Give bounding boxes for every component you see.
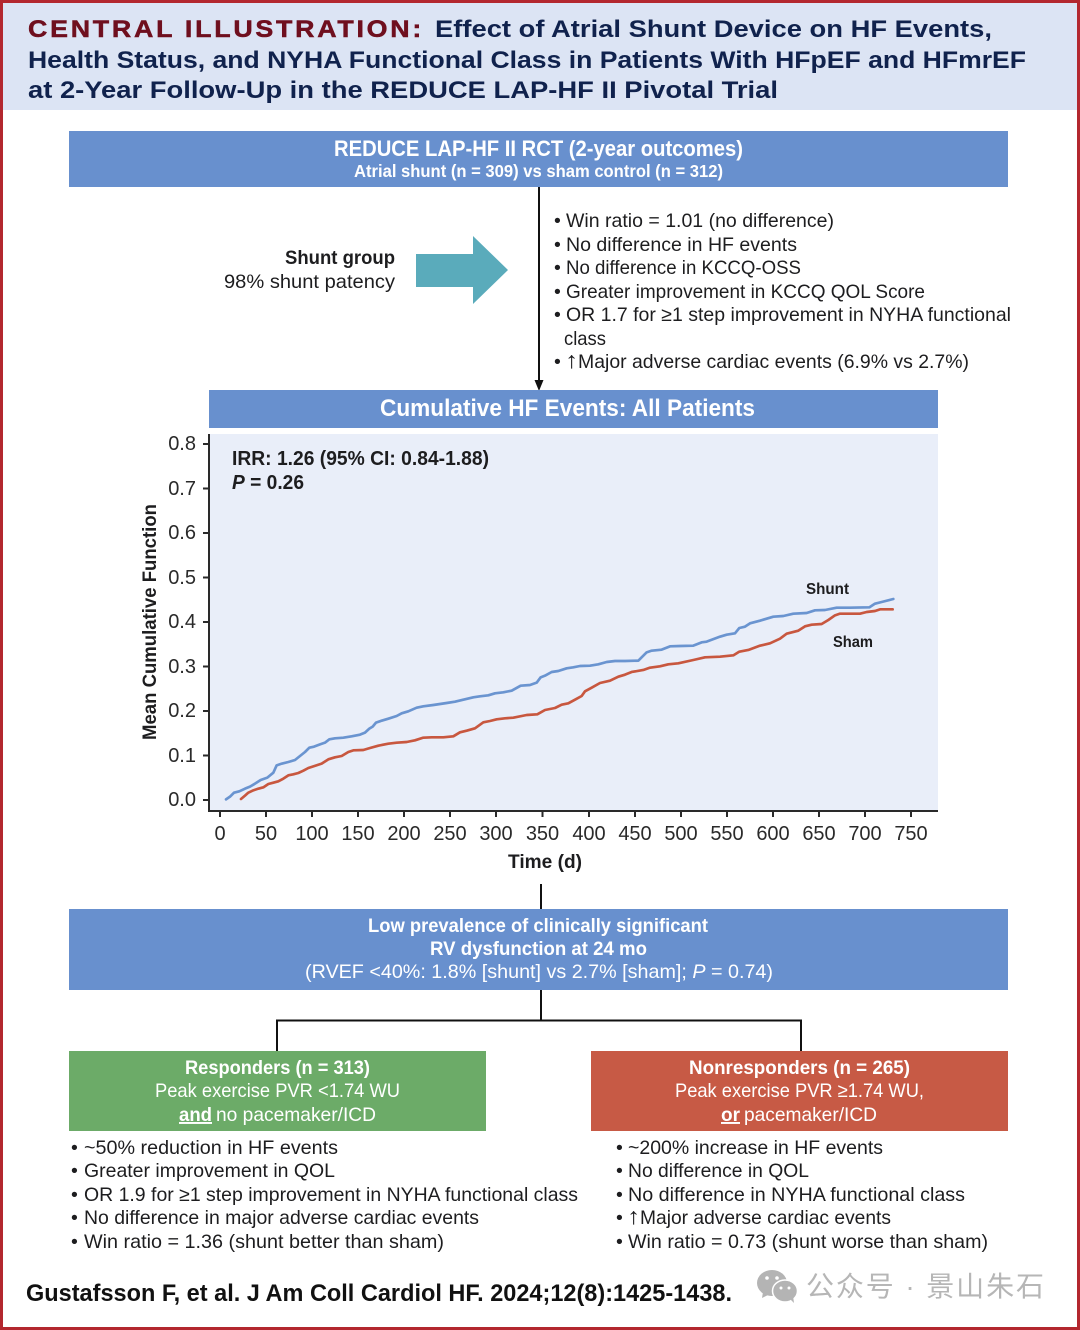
list: overall outcomes: Greater improvement in KCCQ QOL Score — [566, 281, 925, 303]
list: nonresponder outcomes: • — [616, 1184, 623, 1206]
panel: nonresponders: Nonresponders (n = 265) — [689, 1057, 910, 1079]
list: overall outcomes: • — [554, 281, 561, 303]
panel: nonresponders — [591, 1051, 1008, 1131]
arrow: trial to cumulative events — [534, 187, 544, 391]
label: shunt: Shunt — [806, 581, 850, 598]
citation: Gustafsson F, et al. J Am Coll Cardiol HF. 2024;12(8):1425-1438. — [26, 1280, 732, 1307]
line: shunt curve — [226, 599, 893, 799]
line: sham curve — [241, 609, 893, 799]
list: responder outcomes: Win ratio = 1.36 (shunt better than sham) — [84, 1231, 444, 1253]
list: responder outcomes — [71, 1137, 578, 1253]
title banner — [2, 2, 1078, 110]
y-axis tick labels: 0.5 — [168, 567, 196, 589]
list: nonresponder outcomes: • — [616, 1160, 623, 1182]
panel: responders: and — [179, 1104, 212, 1126]
panel: nonresponders: or — [721, 1104, 740, 1126]
y-axis tick labels: 0.1 — [168, 745, 196, 767]
panel: RV dysfunction: Low prevalence of clinically significant — [368, 915, 708, 937]
icon: teal arrow — [416, 236, 508, 304]
list: responder outcomes: Greater improvement in QOL — [84, 1160, 335, 1182]
list: overall outcomes: Win ratio = 1.01 (no difference) — [566, 210, 834, 232]
y-axis tick labels: 0.7 — [168, 478, 196, 500]
list: nonresponder outcomes: ~200% increase in HF events — [628, 1137, 883, 1159]
list: nonresponder outcomes: • — [616, 1137, 623, 1159]
list: nonresponder outcomes: No difference in QOL — [628, 1160, 809, 1182]
y-axis tick labels: 0.4 — [168, 611, 196, 633]
x-axis tick labels: 150 — [341, 823, 375, 845]
y-axis tick labels: 0.8 — [168, 433, 196, 455]
heading: cumulative HF events — [209, 390, 938, 428]
panel: responders: no pacemaker/ICD — [216, 1104, 376, 1126]
list: responder outcomes: • — [71, 1160, 78, 1182]
panel: responders — [69, 1051, 486, 1131]
watermark — [757, 1270, 1044, 1303]
panel: nonresponders: pacemaker/ICD — [744, 1104, 877, 1126]
x-axis tick labels: 600 — [756, 823, 790, 845]
label: sham: Sham — [833, 634, 873, 651]
x-axis tick labels: 50 — [255, 823, 277, 845]
y-axis tick labels: 0.2 — [168, 700, 196, 722]
text: shunt group patency: Shunt group — [285, 247, 395, 269]
list: responder outcomes: • — [71, 1184, 78, 1206]
list: overall outcomes: class — [564, 328, 606, 350]
list: overall outcomes: • — [554, 304, 561, 326]
panel: responders: Peak exercise PVR <1.74 WU — [155, 1080, 400, 1102]
x-axis tick labels: 450 — [618, 823, 652, 845]
x-axis tick labels: 200 — [387, 823, 421, 845]
x-axis tick labels: 750 — [894, 823, 928, 845]
list: nonresponder outcomes: • — [616, 1231, 623, 1253]
panel: trial header: Atrial shunt (n = 309) vs sham control (n = 312) — [354, 161, 723, 181]
panel: responders: Responders (n = 313) — [185, 1057, 370, 1079]
panel: RV dysfunction — [69, 909, 1008, 990]
x-axis tick labels: 0 — [214, 823, 226, 845]
x-axis tick labels — [214, 823, 928, 845]
x-axis tick labels: 250 — [433, 823, 467, 845]
y-axis tick labels — [168, 433, 196, 811]
title banner: Health Status, and NYHA Functional Class in Patients With HFpEF and HFmrEF — [28, 47, 1026, 74]
panel: nonresponders: Peak exercise PVR ≥1.74 WU, — [675, 1080, 924, 1102]
list: overall outcomes: No difference in KCCQ-OSS — [566, 257, 801, 279]
panel: trial header: REDUCE LAP-HF II RCT (2-year outcomes) — [334, 136, 743, 161]
list: overall outcomes: ↑ — [565, 347, 578, 373]
title banner: CENTRAL ILLUSTRATION: — [28, 16, 424, 43]
list: nonresponder outcomes — [616, 1137, 988, 1253]
text: shunt group patency — [224, 247, 395, 293]
x-axis tick labels: 400 — [572, 823, 606, 845]
x-axis tick labels: 550 — [710, 823, 744, 845]
y-axis tick labels: 0.6 — [168, 522, 196, 544]
list: overall outcomes: No difference in HF events — [566, 234, 797, 256]
x-axis tick labels: 500 — [664, 823, 698, 845]
list: overall outcomes: • — [554, 234, 561, 256]
panel: trial header — [69, 131, 1008, 187]
panel: RV dysfunction: (RVEF <40%: 1.8% [shunt] vs 2.7% [sham]; P = 0.74) — [305, 961, 773, 983]
list: nonresponder outcomes: ↑ — [627, 1203, 640, 1229]
list: overall outcomes: • — [554, 351, 561, 373]
y-axis title: Mean Cumulative Function — [140, 504, 161, 740]
connector: split to subgroups — [277, 990, 801, 1051]
list: responder outcomes: ~50% reduction in HF events — [84, 1137, 338, 1159]
list: overall outcomes — [554, 210, 1011, 373]
list: nonresponder outcomes: Major adverse cardiac events — [640, 1207, 891, 1229]
y-axis tick labels: 0.3 — [168, 656, 196, 678]
list: responder outcomes: • — [71, 1207, 78, 1229]
y-axis tick labels: 0.0 — [168, 789, 196, 811]
list: nonresponder outcomes: No difference in NYHA functional class — [628, 1184, 965, 1206]
list: overall outcomes: • — [554, 257, 561, 279]
panel: RV dysfunction: RV dysfunction at 24 mo — [430, 938, 647, 960]
x-axis tick labels: 650 — [802, 823, 836, 845]
title banner: Effect of Atrial Shunt Device on HF Events, — [435, 16, 992, 43]
x-axis tick labels: 300 — [479, 823, 513, 845]
chart: mean cumulative function — [140, 433, 938, 873]
list: responder outcomes: No difference in major adverse cardiac events — [84, 1207, 479, 1229]
x-axis tick labels: 700 — [848, 823, 882, 845]
list: nonresponder outcomes: Win ratio = 0.73 (shunt worse than sham) — [628, 1231, 988, 1253]
list: overall outcomes: • — [554, 210, 561, 232]
x-axis tick labels: 350 — [526, 823, 559, 845]
list: responder outcomes: • — [71, 1137, 78, 1159]
list: overall outcomes: Major adverse cardiac events (6.9% vs 2.7%) — [578, 351, 969, 373]
list: responder outcomes: OR 1.9 for ≥1 step improvement in NYHA functional class — [84, 1184, 578, 1206]
x-axis title: Time (d) — [508, 852, 582, 873]
statistics annotation: IRR: 1.26 (95% CI: 0.84-1.88) — [232, 448, 489, 470]
chart axes and ticks — [203, 434, 938, 817]
statistics annotation: P = 0.26 — [232, 472, 304, 494]
icon: chat bubbles — [757, 1270, 798, 1303]
watermark text: 公众号 · 景山朱石 — [806, 1271, 1044, 1302]
heading: cumulative HF events: Cumulative HF Events: All Patients — [380, 395, 755, 422]
list: responder outcomes: • — [71, 1231, 78, 1253]
statistics annotation — [232, 448, 489, 494]
title banner: at 2-Year Follow-Up in the REDUCE LAP-HF II Pivotal Trial — [28, 77, 778, 104]
x-axis tick labels: 100 — [295, 823, 329, 845]
list: nonresponder outcomes: • — [616, 1207, 623, 1229]
list: overall outcomes: OR 1.7 for ≥1 step improvement in NYHA functional — [566, 304, 1011, 326]
connector: chart to RV panel — [540, 884, 542, 909]
text: shunt group patency: 98% shunt patency — [224, 271, 395, 293]
